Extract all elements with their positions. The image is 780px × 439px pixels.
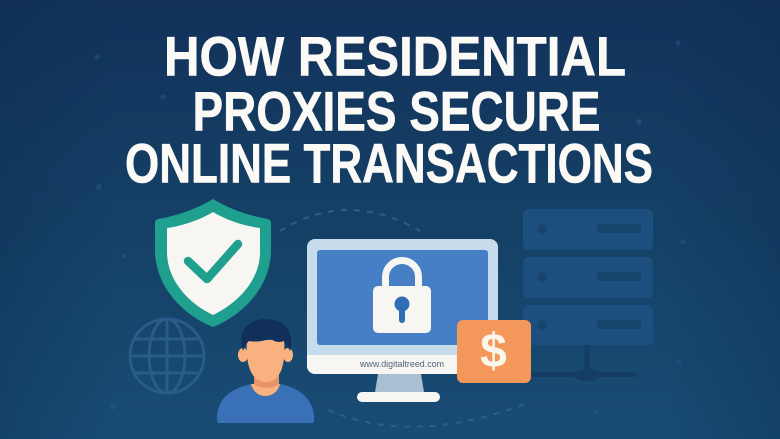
icon: shield with check bbox=[155, 199, 271, 327]
website address: www.digitaltreed.com bbox=[359, 359, 444, 370]
monitor stand bbox=[375, 374, 424, 392]
icon: computer monitor bbox=[307, 239, 498, 402]
title: HOW RESIDENTIAL bbox=[164, 24, 626, 88]
icon: person bbox=[217, 319, 314, 423]
monitor body bbox=[307, 239, 498, 374]
icon: dollar card bbox=[457, 320, 531, 383]
icon: globe bbox=[130, 319, 204, 393]
title: ONLINE TRANSACTIONS bbox=[125, 132, 653, 194]
icon: dollar card: $ bbox=[480, 325, 507, 378]
icon: padlock bbox=[373, 261, 431, 333]
title: PROXIES SECURE bbox=[192, 80, 600, 142]
icon: server stack bbox=[523, 209, 653, 381]
title bbox=[125, 24, 653, 194]
